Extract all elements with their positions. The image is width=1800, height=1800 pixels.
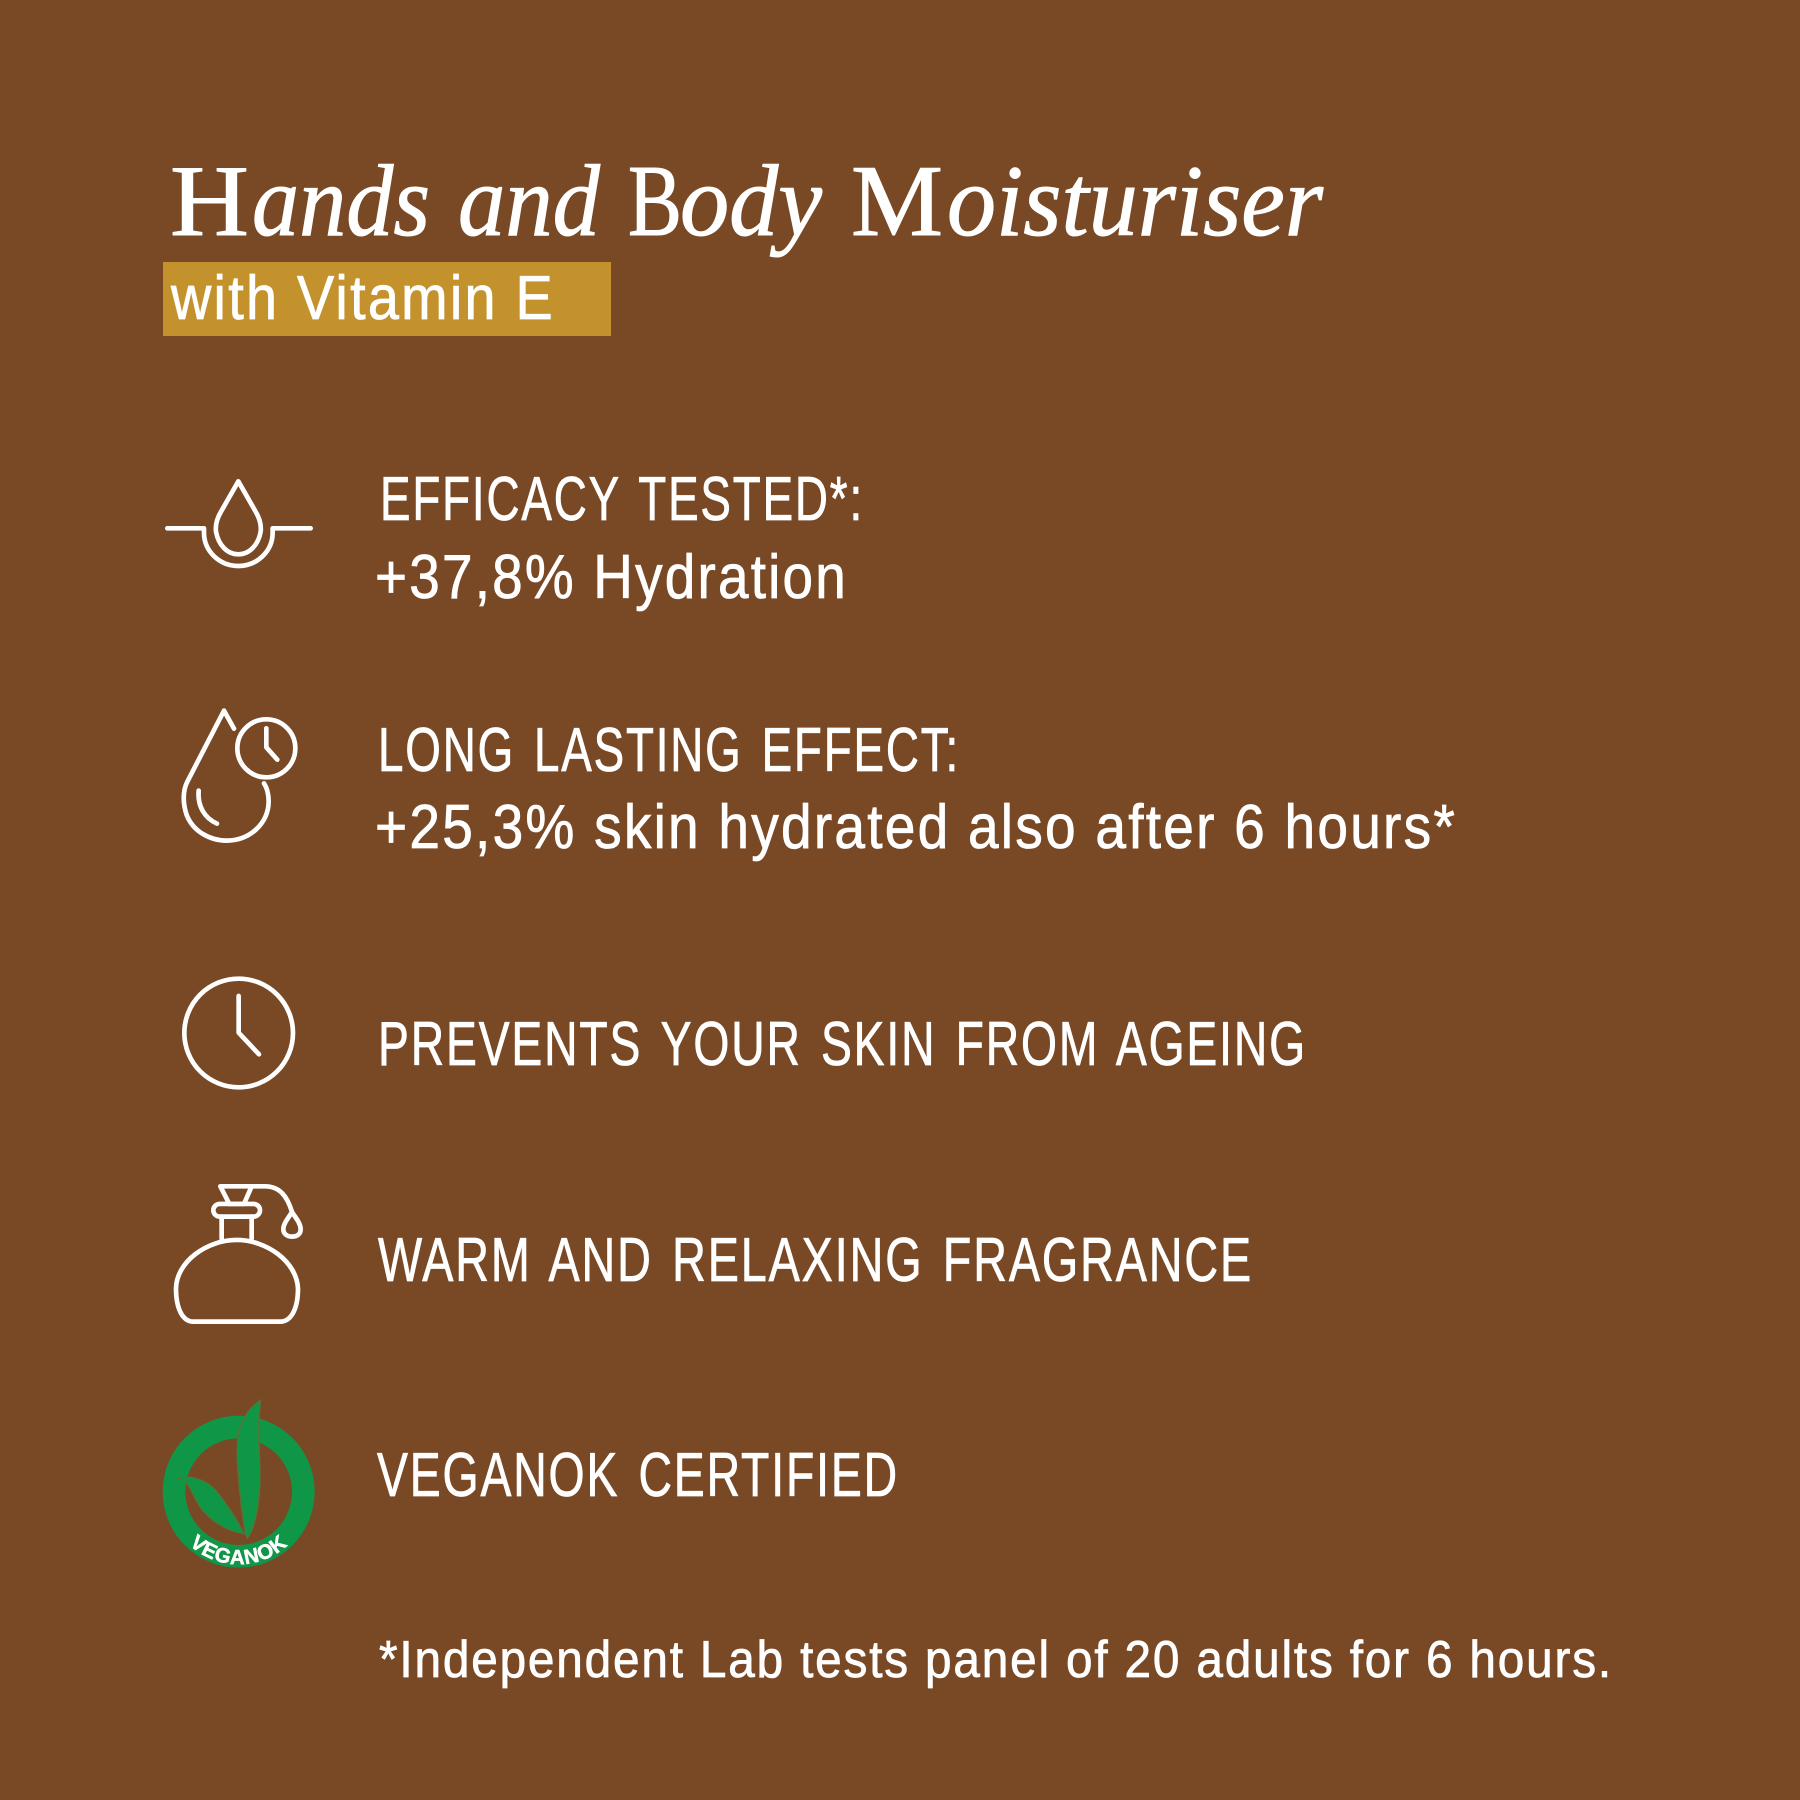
icon: drop with clock <box>184 711 295 841</box>
icon: perfume bottle <box>176 1186 301 1322</box>
text: efficacy tested: EFFICACY TESTED*: <box>380 465 864 534</box>
text: long lasting effect: +25,3% skin hydrated also after 6 hours* <box>375 793 1457 862</box>
text: veganok certified: VEGANOK CERTIFIED <box>377 1441 899 1510</box>
text: warm fragrance: WARM AND RELAXING FRAGRANCE <box>378 1226 1253 1295</box>
left leaf <box>178 1477 244 1534</box>
icon: water drop on skin <box>167 481 311 566</box>
title: ody <box>680 145 823 258</box>
text: efficacy tested: +37,8% Hydration <box>375 543 848 612</box>
icon: clock <box>184 979 293 1087</box>
title: B <box>628 145 682 258</box>
title: oisturiser <box>947 145 1323 258</box>
icon: VeganOK logo: VEGANOK <box>192 1534 288 1565</box>
footnote: *Independent Lab tests panel of 20 adults for 6 hours. <box>379 1631 1613 1689</box>
title: M <box>851 145 943 258</box>
text: efficacy tested <box>375 465 864 612</box>
title: H <box>170 145 249 258</box>
tall leaf <box>237 1400 261 1538</box>
subtitle band: with Vitamin E: with Vitamin E <box>170 264 555 333</box>
badge text <box>166 1492 311 1564</box>
title: and <box>458 145 601 258</box>
text: prevents ageing: PREVENTS YOUR SKIN FROM AGEING <box>378 1010 1307 1079</box>
title: ands <box>252 145 430 258</box>
title <box>170 145 1323 258</box>
text: long lasting effect <box>375 716 1457 862</box>
icon: VeganOK logo <box>162 1398 315 1568</box>
text: long lasting effect: LONG LASTING EFFECT: <box>378 716 960 785</box>
